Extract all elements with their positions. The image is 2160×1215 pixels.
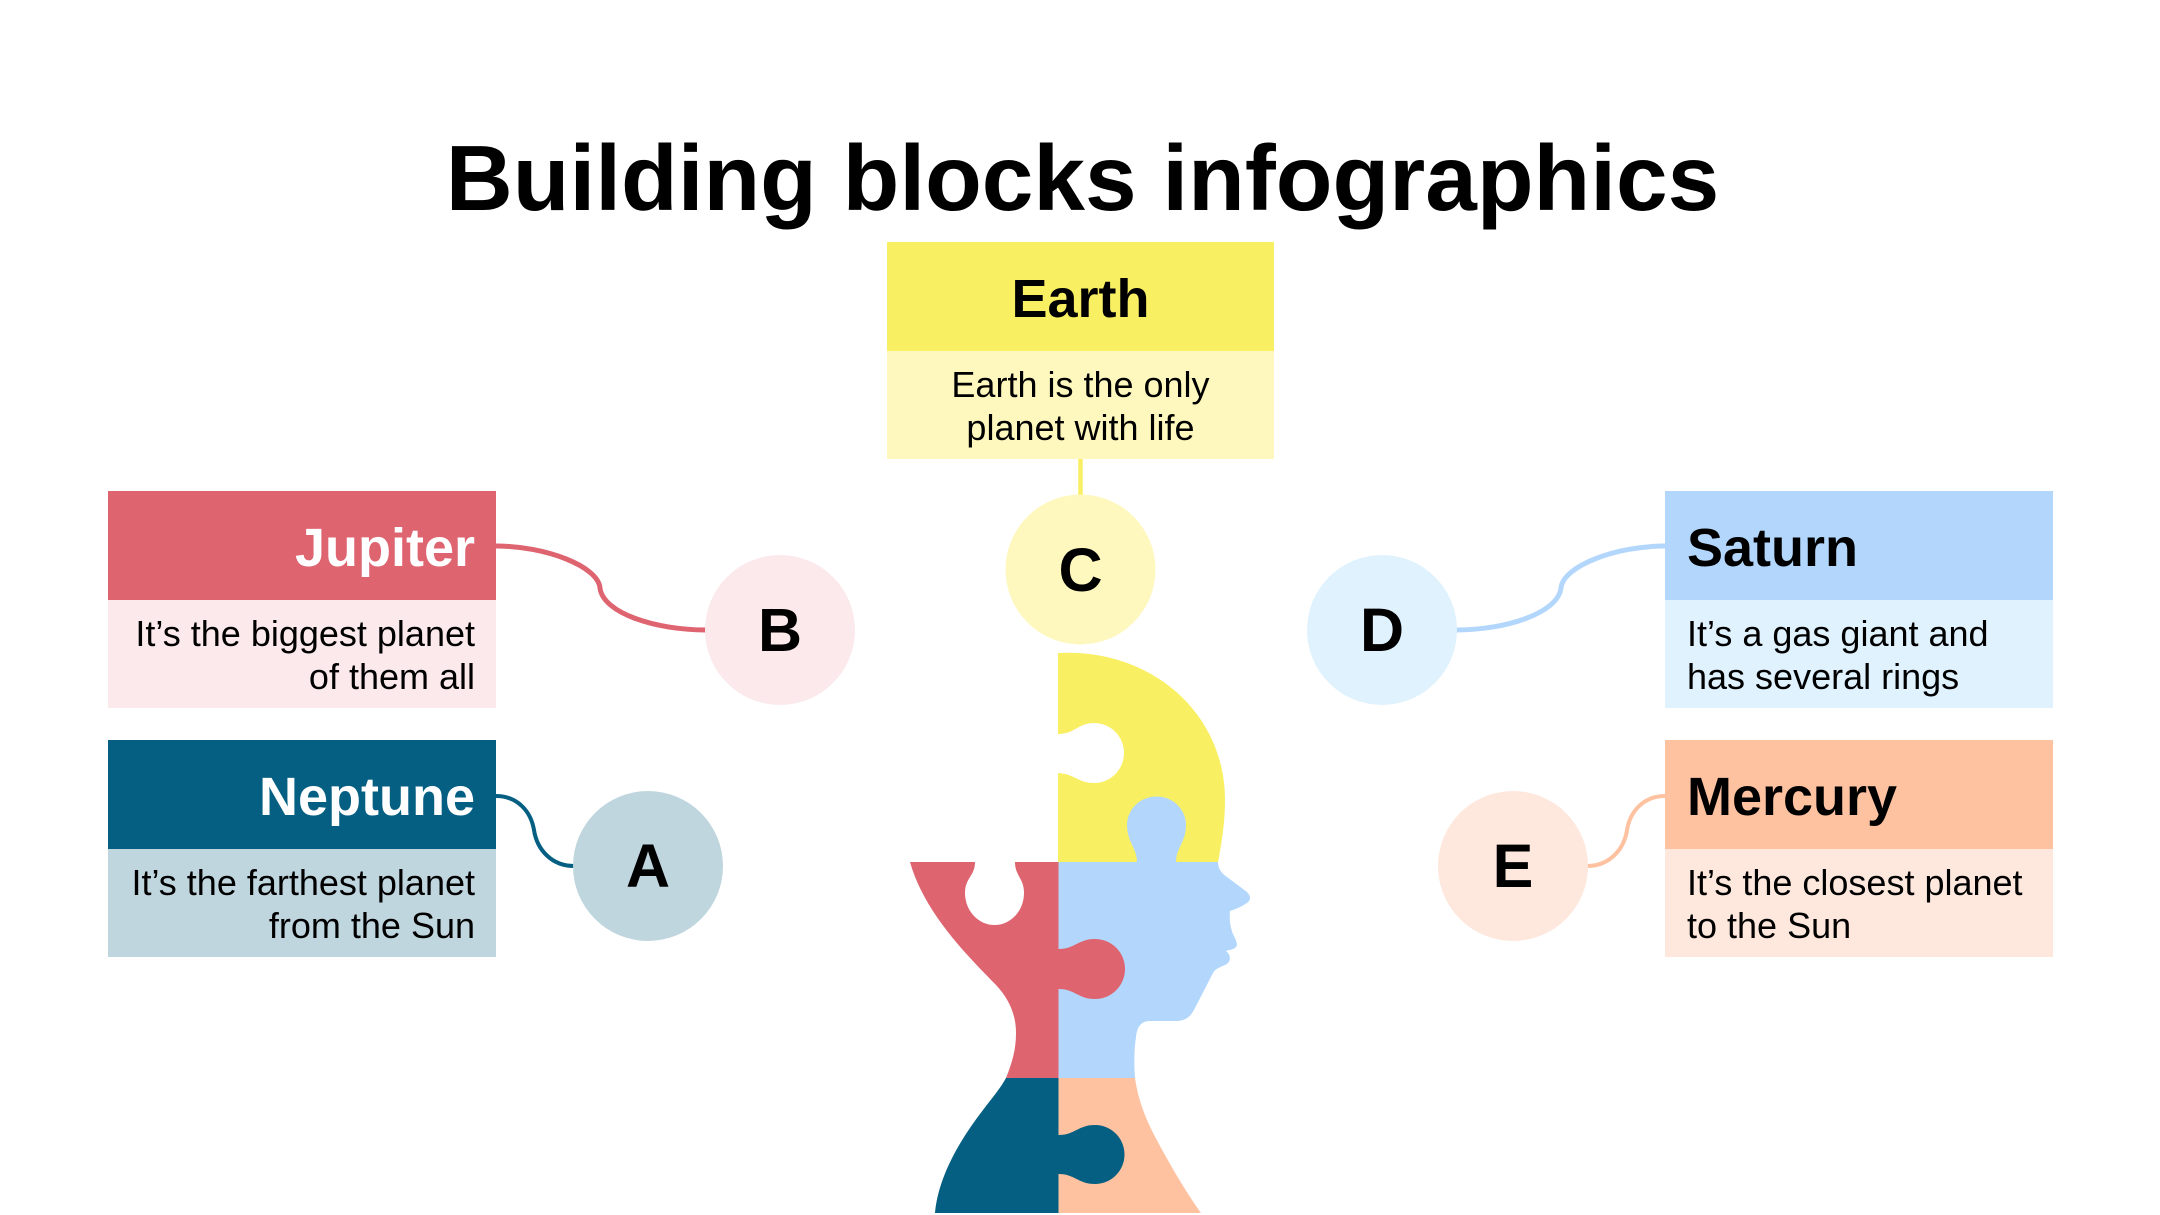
- Mercury description: It’s the closest planet: [1687, 862, 2023, 903]
- Neptune heading: Neptune: [259, 767, 475, 827]
- puzzle piece: yellow crown: [1058, 653, 1225, 863]
- Jupiter header bar: [108, 491, 496, 600]
- Mercury heading: Mercury: [1687, 767, 1897, 827]
- badge B: [705, 555, 855, 705]
- Saturn description: It’s a gas giant and: [1687, 613, 1989, 654]
- connector: Saturn to D: [1456, 546, 1665, 630]
- puzzle piece: peach neck: [1058, 1078, 1201, 1213]
- Saturn body box: [1665, 600, 2053, 708]
- title: Building blocks infographics: [446, 126, 1719, 230]
- badge A: A: [626, 832, 670, 900]
- Neptune header bar: [108, 740, 496, 849]
- Neptune body box: [108, 849, 496, 957]
- panel: Jupiter: [108, 491, 496, 708]
- badge C: C: [1058, 536, 1103, 604]
- puzzle piece: teal neck: [935, 1078, 1124, 1213]
- Earth heading: Earth: [1011, 269, 1150, 329]
- connector: Neptune to A: [496, 796, 574, 866]
- badge C: [1006, 494, 1156, 644]
- badge D: [1307, 555, 1457, 705]
- connector: Earth to C: [1078, 459, 1083, 496]
- badge D: D: [1360, 596, 1404, 664]
- panel: Neptune: [108, 740, 496, 957]
- badge B: B: [758, 596, 802, 664]
- Jupiter description: of them all: [309, 656, 475, 697]
- puzzle piece: blue face: [1058, 796, 1250, 1078]
- puzzle head illustration: [910, 653, 1250, 1213]
- Jupiter body box: [108, 600, 496, 708]
- Saturn heading: Saturn: [1687, 518, 1858, 578]
- Earth description: Earth is the only: [951, 364, 1210, 405]
- Neptune description: It’s the farthest planet: [131, 862, 475, 903]
- panel: Earth: [887, 242, 1274, 459]
- Mercury description: to the Sun: [1687, 905, 1851, 946]
- badge E: [1438, 791, 1588, 941]
- Earth header bar: [887, 242, 1274, 351]
- badge A: [573, 791, 723, 941]
- badge E: E: [1493, 832, 1533, 900]
- Earth body box: [887, 351, 1274, 459]
- Jupiter description: It’s the biggest planet: [135, 613, 475, 654]
- Mercury body box: [1665, 849, 2053, 957]
- connector: Jupiter to B: [496, 546, 706, 630]
- panel: Mercury: [1665, 740, 2053, 957]
- Earth description: planet with life: [966, 407, 1195, 448]
- Saturn description: has several rings: [1687, 656, 1959, 697]
- panel: Saturn: [1665, 491, 2053, 708]
- connector: Mercury to E: [1587, 796, 1665, 866]
- Neptune description: from the Sun: [269, 905, 475, 946]
- Mercury header bar: [1665, 740, 2053, 849]
- puzzle piece: red back of head: [910, 862, 1125, 1078]
- Jupiter heading: Jupiter: [295, 518, 475, 578]
- Saturn header bar: [1665, 491, 2053, 600]
